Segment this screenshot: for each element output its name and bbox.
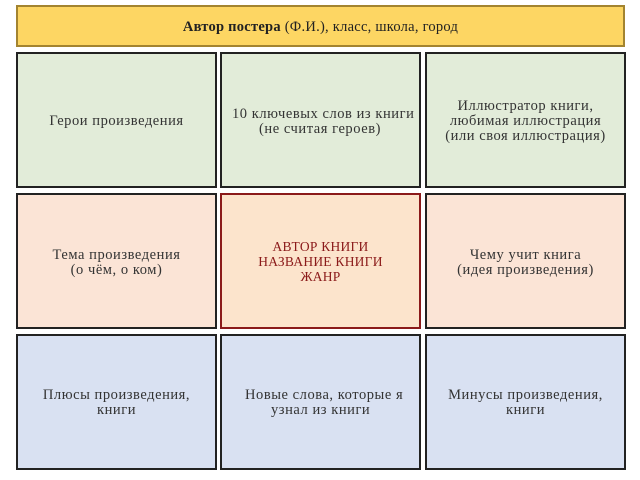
text: keywords: 10 ключевых слов из книги — [232, 106, 414, 122]
text: heroes: Герои произведения — [49, 113, 184, 129]
text: cons: Минусы произведения, — [448, 387, 603, 403]
text: pros: книги — [97, 402, 136, 418]
text: illustrator: любимая иллюстрация — [450, 113, 601, 129]
panel: book idea — [425, 193, 626, 329]
text: pros: Плюсы произведения, — [43, 387, 190, 403]
text: cons: книги — [506, 402, 545, 418]
text: new words: узнал из книги — [271, 402, 370, 418]
panel: theme — [16, 193, 217, 329]
text: book centre: АВТОР КНИГИ — [272, 239, 369, 254]
text: book centre: НАЗВАНИЕ КНИГИ — [258, 254, 383, 269]
text: theme — [52, 247, 180, 278]
text: keywords: (не считая героев) — [259, 121, 381, 137]
panel: new words — [220, 334, 421, 470]
text: book centre: ЖАНР — [300, 269, 341, 284]
text: theme: Тема произведения — [52, 247, 180, 263]
text: book idea: Чему учит книга — [470, 247, 581, 263]
text: illustrator — [445, 98, 606, 144]
text: book centre — [258, 239, 383, 284]
text: pros — [43, 387, 190, 418]
panel: keywords — [220, 52, 421, 188]
text: new words: Новые слова, которые я — [245, 387, 403, 403]
panel: book centre — [220, 193, 421, 329]
panel: pros — [16, 334, 217, 470]
panel: heroes — [16, 52, 217, 188]
text: book idea: (идея произведения) — [457, 262, 594, 278]
panel: cons — [425, 334, 626, 470]
text: keywords — [232, 106, 414, 137]
text: theme: (о чём, о ком) — [71, 262, 162, 278]
text: new words — [245, 387, 403, 418]
header: poster author — [16, 5, 625, 47]
text: illustrator: Иллюстратор книги, — [457, 98, 594, 114]
header text: Автор постера (Ф.И.), класс, школа, город — [183, 19, 458, 35]
text: cons — [448, 387, 603, 418]
text: illustrator: (или своя иллюстрация) — [445, 128, 606, 144]
panel: illustrator — [425, 52, 626, 188]
text: book idea — [457, 247, 594, 278]
